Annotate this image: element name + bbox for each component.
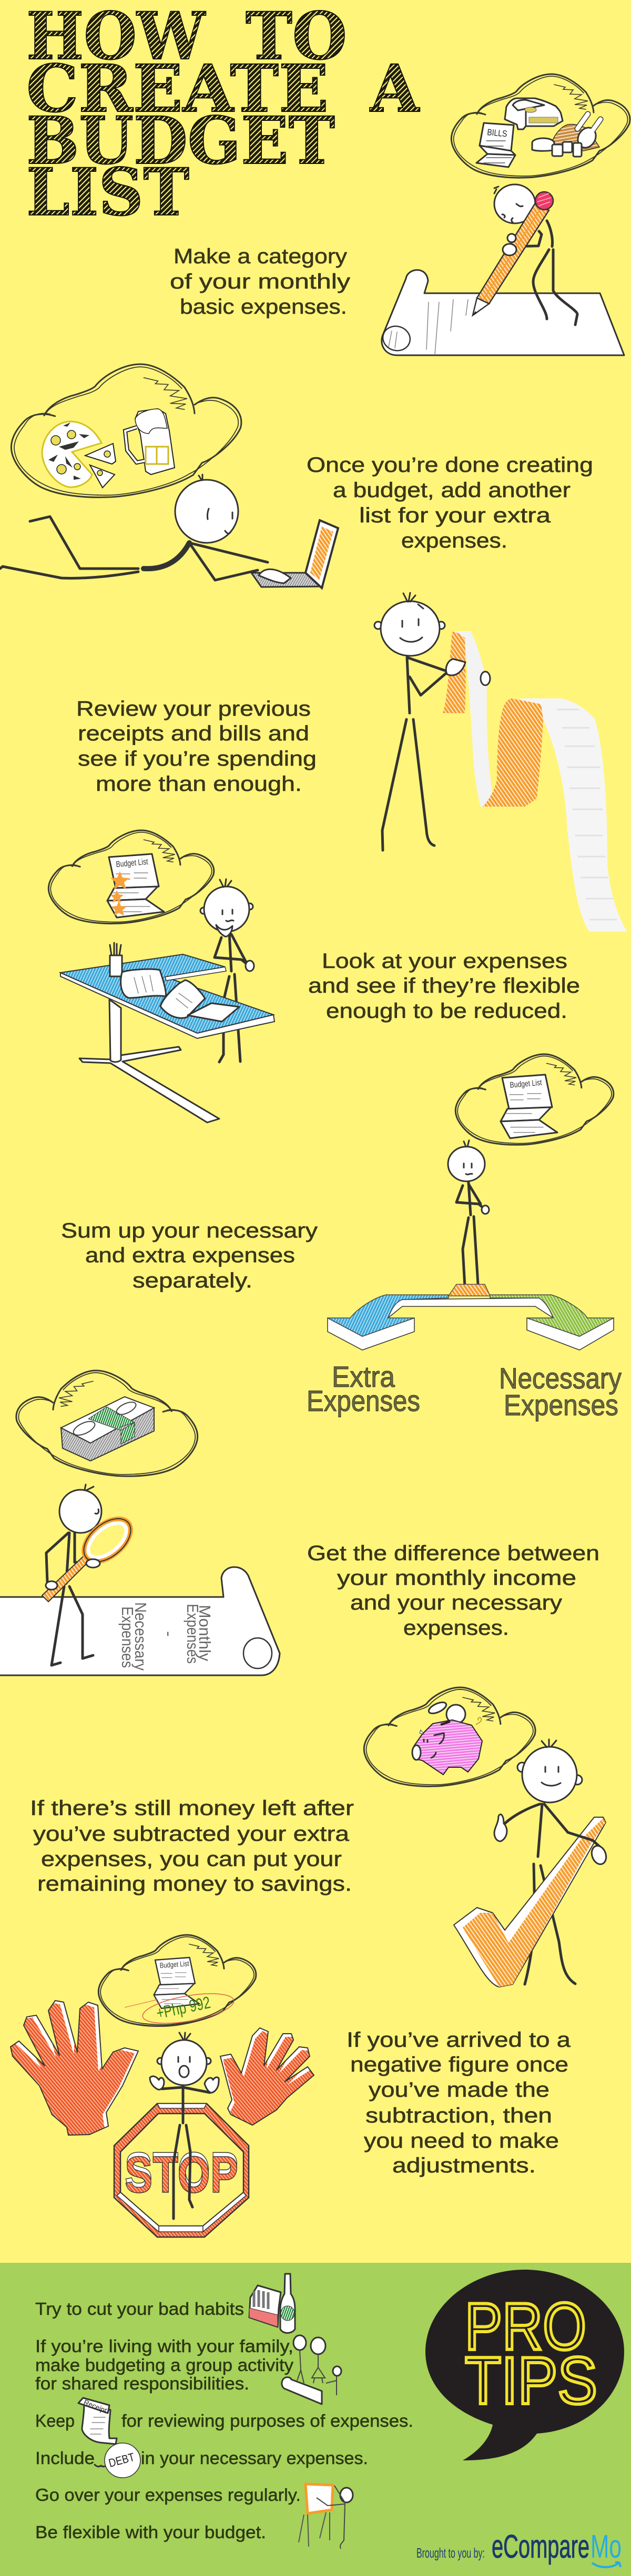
tip: keep receipts: for reviewing purposes of expenses. bbox=[121, 2411, 413, 2430]
icon: thought cloud with money stack bbox=[16, 1371, 198, 1476]
brand logo: eCompareMo: Brought to you by: bbox=[416, 2545, 485, 2561]
stick figure lying down bbox=[0, 475, 268, 580]
title bbox=[26, 0, 420, 231]
text: step 6: your monthly income bbox=[337, 1567, 576, 1590]
text: step 4: and see if they’re flexible bbox=[308, 974, 580, 997]
title: LIST bbox=[26, 154, 189, 231]
step 5 illustration: figure on split arrow bbox=[307, 1054, 622, 1421]
tip: family budgeting bbox=[35, 2335, 341, 2404]
tip: review regularly bbox=[35, 2484, 353, 2549]
text: step 2: Once you’re done creating bbox=[307, 454, 593, 477]
icon: debt ball and chain: DEBT bbox=[107, 2450, 136, 2470]
text: step 6 bbox=[307, 1542, 599, 1640]
stick figure smiling bbox=[374, 593, 490, 850]
label: necessary expenses: Expenses bbox=[504, 1388, 618, 1421]
text: step 6: and your necessary bbox=[350, 1591, 562, 1614]
tip: family budgeting: for shared responsibilities. bbox=[35, 2374, 249, 2393]
icon: family around scroll bbox=[282, 2335, 341, 2404]
label: necessary expenses bbox=[499, 1362, 622, 1421]
text: step 4: Look at your expenses bbox=[322, 950, 567, 973]
icon: thought cloud with budget list and stars: Budget List bbox=[116, 858, 149, 869]
step 4 illustration: figure at desk bbox=[48, 830, 274, 1122]
icon: stop sign: STOP bbox=[125, 2146, 238, 2203]
tip: be flexible: Be flexible with your budget. bbox=[35, 2522, 266, 2542]
text: step 4: enough to be reduced. bbox=[326, 1000, 567, 1023]
icon: thought cloud with basic expenses: BILLS bbox=[487, 127, 507, 139]
icon: receipt roll bbox=[443, 631, 627, 932]
scroll with formula bbox=[0, 1567, 280, 1675]
label: extra expenses: Extra bbox=[332, 1360, 395, 1393]
text: step 7 bbox=[30, 1797, 354, 1895]
text: step 3: see if you’re spending bbox=[78, 747, 317, 770]
icon: receipt bbox=[78, 2398, 117, 2444]
icon: thought cloud with negative figure bbox=[98, 1935, 256, 2029]
icon: thought cloud with budget list and stars bbox=[48, 830, 214, 923]
step 8 illustration: stop sign and hands bbox=[7, 1935, 317, 2237]
text: step 1: Make a category bbox=[174, 245, 347, 268]
step 3 illustration: figure with long receipt bbox=[374, 593, 627, 932]
icon: thought cloud with basic expenses bbox=[451, 74, 630, 178]
panel: pro tips bbox=[0, 2263, 631, 2576]
text: step 8: you’ve made the bbox=[369, 2078, 549, 2101]
text: step 3 bbox=[76, 697, 317, 796]
tip: review regularly: Go over your expenses regularly. bbox=[35, 2485, 301, 2505]
tip: debt bbox=[35, 2443, 368, 2478]
title: A bbox=[370, 51, 420, 127]
speech bubble: pro tips bbox=[425, 2270, 624, 2460]
brand logo: eCompareMo bbox=[416, 2529, 622, 2567]
icon: thought cloud with negative figure: Budget List bbox=[159, 1959, 189, 1970]
text: step 8 bbox=[347, 2028, 571, 2177]
tip: bad habits bbox=[35, 2274, 295, 2333]
tip: keep receipts bbox=[35, 2398, 413, 2444]
text: step 8: adjustments. bbox=[392, 2154, 536, 2177]
icon: laptop bbox=[251, 520, 338, 588]
icon: check mark bbox=[454, 1817, 606, 1987]
text: step 8: negative figure once bbox=[350, 2053, 568, 2076]
icon: easel with presenter bbox=[299, 2484, 353, 2549]
text: step 1 bbox=[170, 245, 350, 318]
stick figure surprised bbox=[150, 2033, 219, 2219]
tip: debt: in your necessary expenses. bbox=[141, 2448, 368, 2468]
scroll with formula: Necessary bbox=[131, 1602, 150, 1671]
icon: thought cloud with piggy bank bbox=[364, 1687, 535, 1786]
text: step 5 bbox=[61, 1219, 318, 1292]
icon: stop sign: STOP bbox=[125, 2141, 238, 2199]
label: extra expenses: Expenses bbox=[307, 1384, 420, 1417]
title: CREATE bbox=[26, 51, 329, 127]
text: step 2: list for your extra bbox=[359, 504, 551, 527]
split arrow bbox=[328, 1284, 614, 1350]
text: step 7: remaining money to savings. bbox=[37, 1872, 352, 1895]
stick figure with magnifier bbox=[42, 1485, 139, 1665]
stick figure standing bbox=[448, 1140, 489, 1286]
tip: debt: Include bbox=[35, 2448, 95, 2468]
scroll paper bbox=[380, 270, 624, 355]
text: step 8: If you’ve arrived to a bbox=[347, 2028, 571, 2052]
text: step 1: of your monthly bbox=[170, 270, 350, 293]
icon: right hand bbox=[220, 2028, 317, 2128]
icon: thought cloud with pizza and beer bbox=[11, 364, 241, 497]
label: extra expenses bbox=[307, 1360, 420, 1417]
scroll with formula: Expenses bbox=[118, 1606, 137, 1668]
step 1 illustration: writing with giant pencil bbox=[380, 74, 630, 355]
title: HOW bbox=[26, 0, 206, 75]
icon: stop sign bbox=[114, 2104, 249, 2237]
step 6 illustration: figure with magnifier bbox=[0, 1371, 280, 1675]
text: step 3: Review your previous bbox=[76, 697, 311, 720]
step 7 illustration: figure with check mark bbox=[364, 1687, 608, 1987]
text: step 8: subtraction, then bbox=[365, 2104, 552, 2127]
icon: receipt: Receipt bbox=[83, 2398, 108, 2415]
title: BUDGET bbox=[26, 103, 335, 179]
text: step 3: receipts and bills and bbox=[78, 722, 309, 745]
text: step 8: you need to make bbox=[364, 2129, 559, 2152]
text: step 7: you’ve subtracted your extra bbox=[33, 1822, 350, 1846]
text: step 6: expenses. bbox=[403, 1616, 509, 1640]
text: step 6: Get the difference between bbox=[307, 1542, 599, 1565]
icon: blue desk with papers bbox=[60, 943, 274, 1122]
text: step 4 bbox=[308, 950, 580, 1023]
text: step 5: Sum up your necessary bbox=[61, 1219, 318, 1242]
text: step 5: and extra expenses bbox=[85, 1244, 295, 1267]
icon: thought cloud with negative figure: +Php 992 bbox=[155, 1993, 212, 2023]
icon: left hand bbox=[7, 2001, 138, 2137]
text: step 2 bbox=[307, 454, 593, 552]
arm holding check mark bbox=[544, 1804, 608, 1866]
text: step 7: If there’s still money left after bbox=[30, 1797, 354, 1820]
tip: family budgeting: make budgeting a group activity bbox=[35, 2355, 294, 2375]
icon: thought cloud with budget list bbox=[455, 1054, 614, 1145]
icon: cigarettes and bottle bbox=[249, 2274, 295, 2333]
icon: debt ball and chain bbox=[95, 2443, 140, 2478]
tip: keep receipts: Keep bbox=[35, 2411, 75, 2430]
text: step 7: expenses, you can put your bbox=[41, 1848, 342, 1871]
text: step 3: more than enough. bbox=[96, 772, 302, 796]
text: step 2: expenses. bbox=[401, 529, 507, 552]
scroll with formula: - bbox=[160, 1631, 178, 1636]
text: step 5: separately. bbox=[133, 1269, 252, 1292]
scroll with formula: Expenses bbox=[184, 1604, 202, 1664]
stick figure giving thumbs up bbox=[494, 1739, 582, 1984]
text: step 2: a budget, add another bbox=[333, 479, 571, 502]
title: TO bbox=[246, 0, 347, 75]
stick figure writing bbox=[473, 184, 577, 325]
tip: family budgeting: If you’re living with your family, bbox=[35, 2336, 293, 2356]
stick figure thinking, behind desk bbox=[200, 879, 254, 1062]
step 2 illustration: figure at laptop bbox=[0, 364, 338, 588]
icon: thought cloud with budget list: Budget List bbox=[510, 1078, 543, 1090]
scroll with formula: Monthly bbox=[196, 1605, 214, 1661]
speech bubble: pro tips: PRO bbox=[465, 2289, 586, 2364]
text: step 1: basic expenses. bbox=[180, 295, 347, 318]
tip: bad habits: Try to cut your bad habits bbox=[35, 2299, 244, 2319]
speech bubble: pro tips: TIPS bbox=[465, 2343, 597, 2418]
